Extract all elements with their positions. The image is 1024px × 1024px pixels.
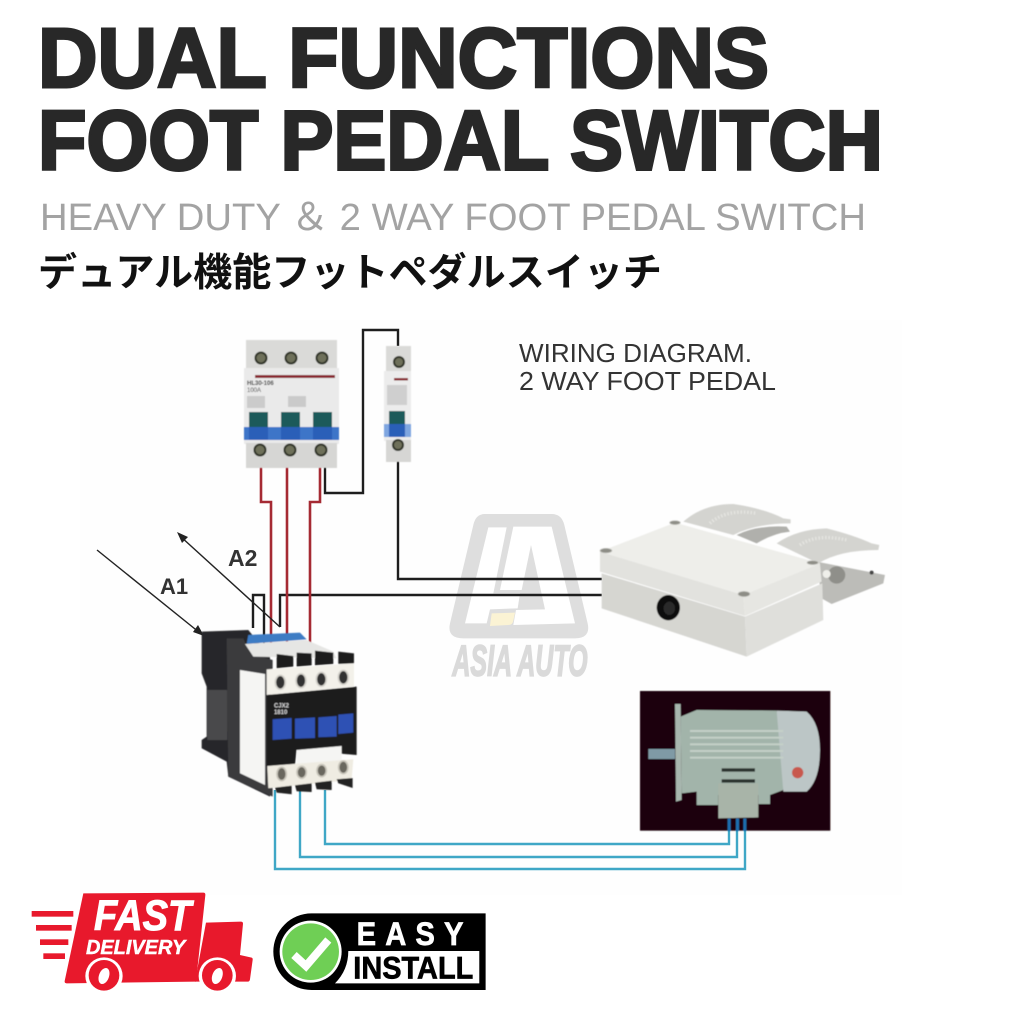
arrows A1 and A2 — [97, 532, 280, 636]
badge: easy install: INSTALL — [353, 950, 473, 985]
red power wires — [261, 465, 320, 653]
three-pole circuit breaker — [244, 340, 339, 468]
title: FOOT PEDAL SWITCH — [38, 94, 883, 188]
badge: fast delivery truck: DELIVERY — [86, 936, 187, 959]
title — [38, 11, 883, 188]
wiring diagram caption: 2 WAY FOOT PEDAL — [519, 368, 776, 396]
title: DUAL FUNCTIONS — [38, 11, 769, 105]
wheels — [85, 957, 236, 995]
badge: fast delivery truck: FAST — [94, 892, 195, 940]
badge: fast delivery truck — [32, 892, 253, 995]
teal motor wires — [275, 790, 745, 869]
foot pedal switch — [600, 504, 885, 657]
three-pole circuit breaker: HL30-106 — [247, 381, 274, 387]
single-pole circuit breaker — [384, 346, 411, 462]
wiring diagram caption: WIRING DIAGRAM. — [519, 340, 752, 368]
label A2: A2 — [228, 545, 257, 571]
base plate — [817, 562, 885, 604]
watermark: Asia Auto logo — [449, 514, 588, 685]
wiring diagram caption — [519, 340, 776, 396]
badge: easy install — [273, 913, 486, 990]
cargo box and cab — [65, 893, 205, 983]
speed lines — [32, 911, 73, 959]
contactor: 1810 — [274, 710, 288, 716]
badge: easy install: EASY — [357, 916, 473, 952]
three-pole circuit breaker: 100A — [247, 388, 261, 394]
watermark: Asia Auto logo: ASIA AUTO — [452, 637, 588, 685]
cable gland — [657, 595, 680, 620]
box lid — [600, 552, 745, 616]
japanese subtitle: デュアル機能フットペダルスイッチ — [38, 251, 662, 295]
subtitle: HEAVY DUTY ＆ 2 WAY FOOT PEDAL SWITCH — [40, 197, 866, 239]
label A1: A1 — [160, 574, 188, 599]
black control wires — [253, 330, 602, 653]
electric motor — [640, 691, 830, 831]
contactor: CJX2 — [274, 703, 290, 709]
contactor — [202, 630, 357, 797]
pedals — [683, 504, 791, 535]
box lower — [602, 573, 747, 657]
